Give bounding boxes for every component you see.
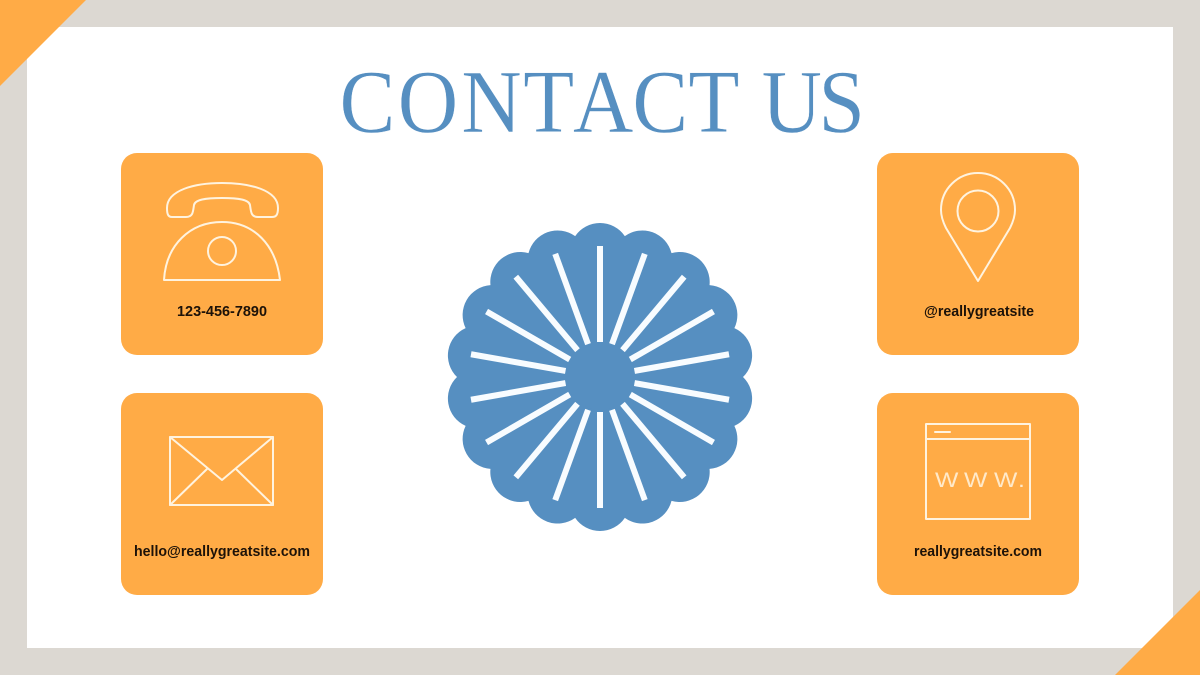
icon: envelope: [170, 437, 273, 505]
central flower emblem: [448, 223, 752, 531]
corner triangle: top left: [0, 0, 86, 86]
social handle text: @reallygreatsite: [924, 304, 1034, 320]
panel: website: [877, 393, 1079, 595]
phone number: 123-456-7890: [177, 304, 267, 320]
panel: phone: [121, 153, 323, 355]
icon: browser window: WWW.: [935, 468, 1025, 492]
icon: browser window: [926, 424, 1030, 519]
title: CONTACT US: [339, 52, 865, 152]
website address: reallygreatsite.com: [914, 544, 1042, 560]
corner triangle: bottom right: [1115, 590, 1200, 675]
panel: email: [121, 393, 323, 595]
panel: social handle: [877, 153, 1079, 355]
icon: telephone: [164, 183, 280, 280]
icon: location pin: [941, 173, 1015, 281]
email address: hello@reallygreatsite.com: [134, 544, 310, 560]
